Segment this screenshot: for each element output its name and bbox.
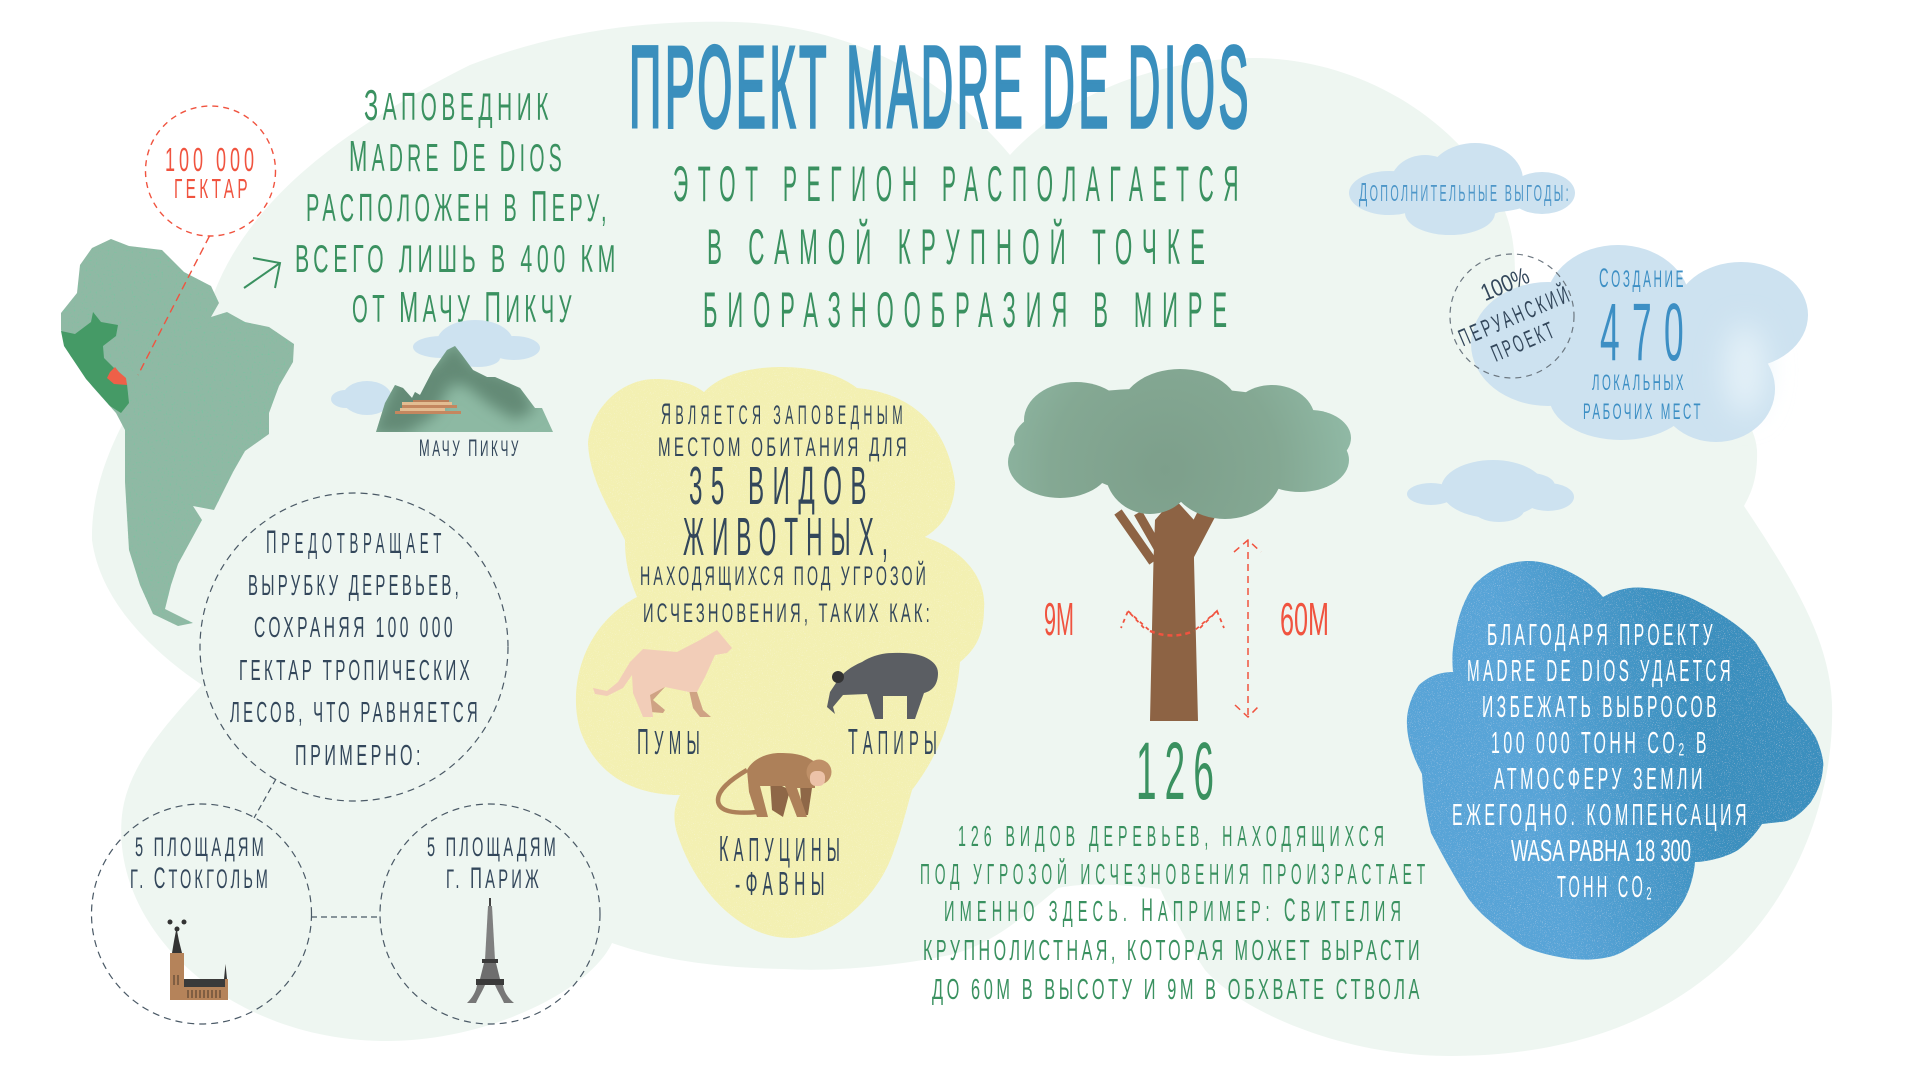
heading: biodiversity	[673, 156, 1248, 338]
panel: deforestation prevention: СОХРАНЯЯ 100 000	[254, 612, 456, 644]
icon: capuchin monkey	[718, 753, 832, 817]
map: South America with Peru	[61, 239, 294, 626]
map: Madre de Dios region	[107, 367, 127, 385]
panel: Paris	[380, 804, 600, 1024]
map: Peru	[61, 312, 129, 413]
icon: Machu Picchu mountain	[331, 320, 553, 435]
panel: deforestation prevention: ПРИМЕРНО:	[295, 740, 424, 772]
icon: terraces	[395, 400, 461, 414]
annotation: tree height 60 m	[1234, 540, 1329, 717]
text: tree species: КРУПНОЛИСТНАЯ, КОТОРАЯ МОЖЕТ ВЫРАСТИ	[923, 935, 1423, 967]
text: tree species: ИМЕННО ЗДЕСЬ. НАПРИМЕР: СВИТЕЛИЯ	[944, 892, 1406, 928]
label: capuchins: -ФАВНЫ	[735, 865, 830, 902]
panel: endangered animals	[576, 367, 984, 938]
icon: trunk	[1150, 498, 1198, 721]
text: animal intro: 35 ВИДОВ	[689, 456, 875, 516]
panel: CO2 savings	[1407, 561, 1823, 960]
icon: canopy	[1008, 369, 1351, 519]
cloud: 470 local jobs: СОЗДАНИЕ	[1599, 263, 1686, 293]
text: tree species: 126 ВИДОВ ДЕРЕВЬЕВ, НАХОДЯЩИХСЯ	[958, 821, 1389, 853]
cloud: small decorative	[1407, 460, 1574, 522]
connector lines	[254, 779, 380, 917]
panel: Stockholm: 5 ПЛОЩАДЯМ	[135, 832, 267, 862]
panel: Paris: 5 ПЛОЩАДЯМ	[427, 832, 559, 862]
label: pumas: ПУМЫ	[637, 721, 705, 762]
panel: deforestation prevention: ЛЕСОВ, ЧТО РАВНЯЕТСЯ	[230, 697, 481, 729]
text: В САМОЙ КРУПНОЙ ТОЧКЕ	[707, 218, 1215, 275]
label: capuchins	[719, 828, 845, 902]
text: 126	[1136, 726, 1222, 817]
text: animal intro: МЕСТОМ ОБИТАНИЯ ДЛЯ	[658, 432, 910, 462]
panel: CO2 savings: 100 000 ТОНН CO₂ В	[1491, 725, 1710, 760]
badge: 100% Peruvian project: ПЕРУАНСКИЙ	[1454, 279, 1576, 352]
cloud: 470 local jobs	[1471, 245, 1808, 442]
badge: 100% Peruvian project: ПРОЕКТ	[1487, 316, 1561, 368]
text: reserve location: MADRE DE DIOS	[349, 132, 566, 181]
panel: CO2 savings: АТМОСФЕРУ ЗЕМЛИ	[1494, 761, 1706, 796]
map: continent	[61, 239, 294, 626]
panel: CO2 savings: WASA РАВНА 18 300	[1511, 833, 1691, 868]
text: reserve location: РАСПОЛОЖЕН В ПЕРУ,	[306, 182, 611, 231]
icon: clouds behind the mountain	[331, 320, 540, 415]
icon: puma	[593, 630, 732, 717]
icon: Stockholm City Hall	[168, 920, 228, 1000]
text: reserve location: ВСЕГО ЛИШЬ В 400 КМ	[295, 238, 620, 281]
annotation: tree height 60 m: 60М	[1280, 593, 1329, 645]
badge: 100% Peruvian project: 100%	[1477, 262, 1534, 307]
cloud: additional benefits	[1349, 143, 1575, 235]
badge: 100% Peruvian project	[1442, 250, 1586, 378]
callout: 100 000 hectares	[138, 106, 276, 375]
panel: Stockholm: Г. СТОКГОЛЬМ	[130, 862, 271, 895]
annotation: trunk girth 9 m: 9М	[1044, 593, 1074, 645]
cloud: 470 local jobs: ЛОКАЛЬНЫХ	[1592, 370, 1686, 395]
panel: deforestation prevention: ГЕКТАР ТРОПИЧЕСКИХ	[239, 655, 473, 687]
panel: endangered animals: ЖИВОТНЫХ,	[683, 507, 896, 567]
cloud: 470 local jobs: 470	[1600, 287, 1696, 378]
panel: endangered animals: ТАПИРЫ	[848, 721, 942, 762]
text: БИОРАЗНООБРАЗИЯ В МИРЕ	[703, 282, 1237, 338]
cloud: 470 local jobs: РАБОЧИХ МЕСТ	[1583, 399, 1703, 424]
icon: Eiffel tower	[467, 898, 514, 1003]
panel: CO2 savings: ТОНН CO₂	[1557, 869, 1655, 904]
icon: tapir	[827, 653, 938, 719]
text: animal intro	[640, 398, 933, 628]
panel: Stockholm	[92, 804, 312, 1024]
panel: deforestation prevention: ПРЕДОТВРАЩАЕТ	[266, 524, 446, 560]
text: reserve location: ЗАПОВЕДНИК	[364, 81, 553, 130]
panel: endangered animals: КАПУЦИНЫ	[719, 828, 845, 869]
text: reserve location: ОТ МАЧУ ПИКЧУ	[352, 283, 576, 332]
text: animal intro: ЯВЛЯЕТСЯ ЗАПОВЕДНЫМ	[661, 398, 907, 431]
callout: 100 000 hectares: 100 000	[165, 141, 258, 178]
label: Machu Picchu: МАЧУ ПИКЧУ	[419, 435, 521, 462]
callout: 100 000 hectares: ГЕКТАР	[174, 173, 251, 204]
text: animal intro: ИСЧЕЗНОВЕНИЯ, ТАКИХ КАК:	[643, 598, 933, 628]
panel: deforestation prevention	[200, 493, 508, 801]
icon: branches	[1118, 512, 1211, 562]
panel: deforestation prevention: ВЫРУБКУ ДЕРЕВЬЕВ,	[248, 570, 462, 602]
text: reserve location	[295, 81, 620, 332]
panel: Paris: Г. ПАРИЖ	[446, 862, 542, 895]
text: ДОПОЛНИТЕЛЬНЫЕ ВЫГОДЫ:	[1359, 177, 1571, 207]
annotation: trunk girth 9 m	[1044, 593, 1224, 645]
text: tree species: ДО 60М В ВЫСОТУ И 9М В ОБХВАТЕ СТВОЛА	[932, 974, 1423, 1006]
text: tree species	[920, 821, 1430, 1006]
text: animal intro: НАХОДЯЩИХСЯ ПОД УГРОЗОЙ	[640, 560, 929, 591]
icon: tree	[1008, 369, 1351, 721]
arrow: to Machu Picchu text	[244, 258, 280, 288]
